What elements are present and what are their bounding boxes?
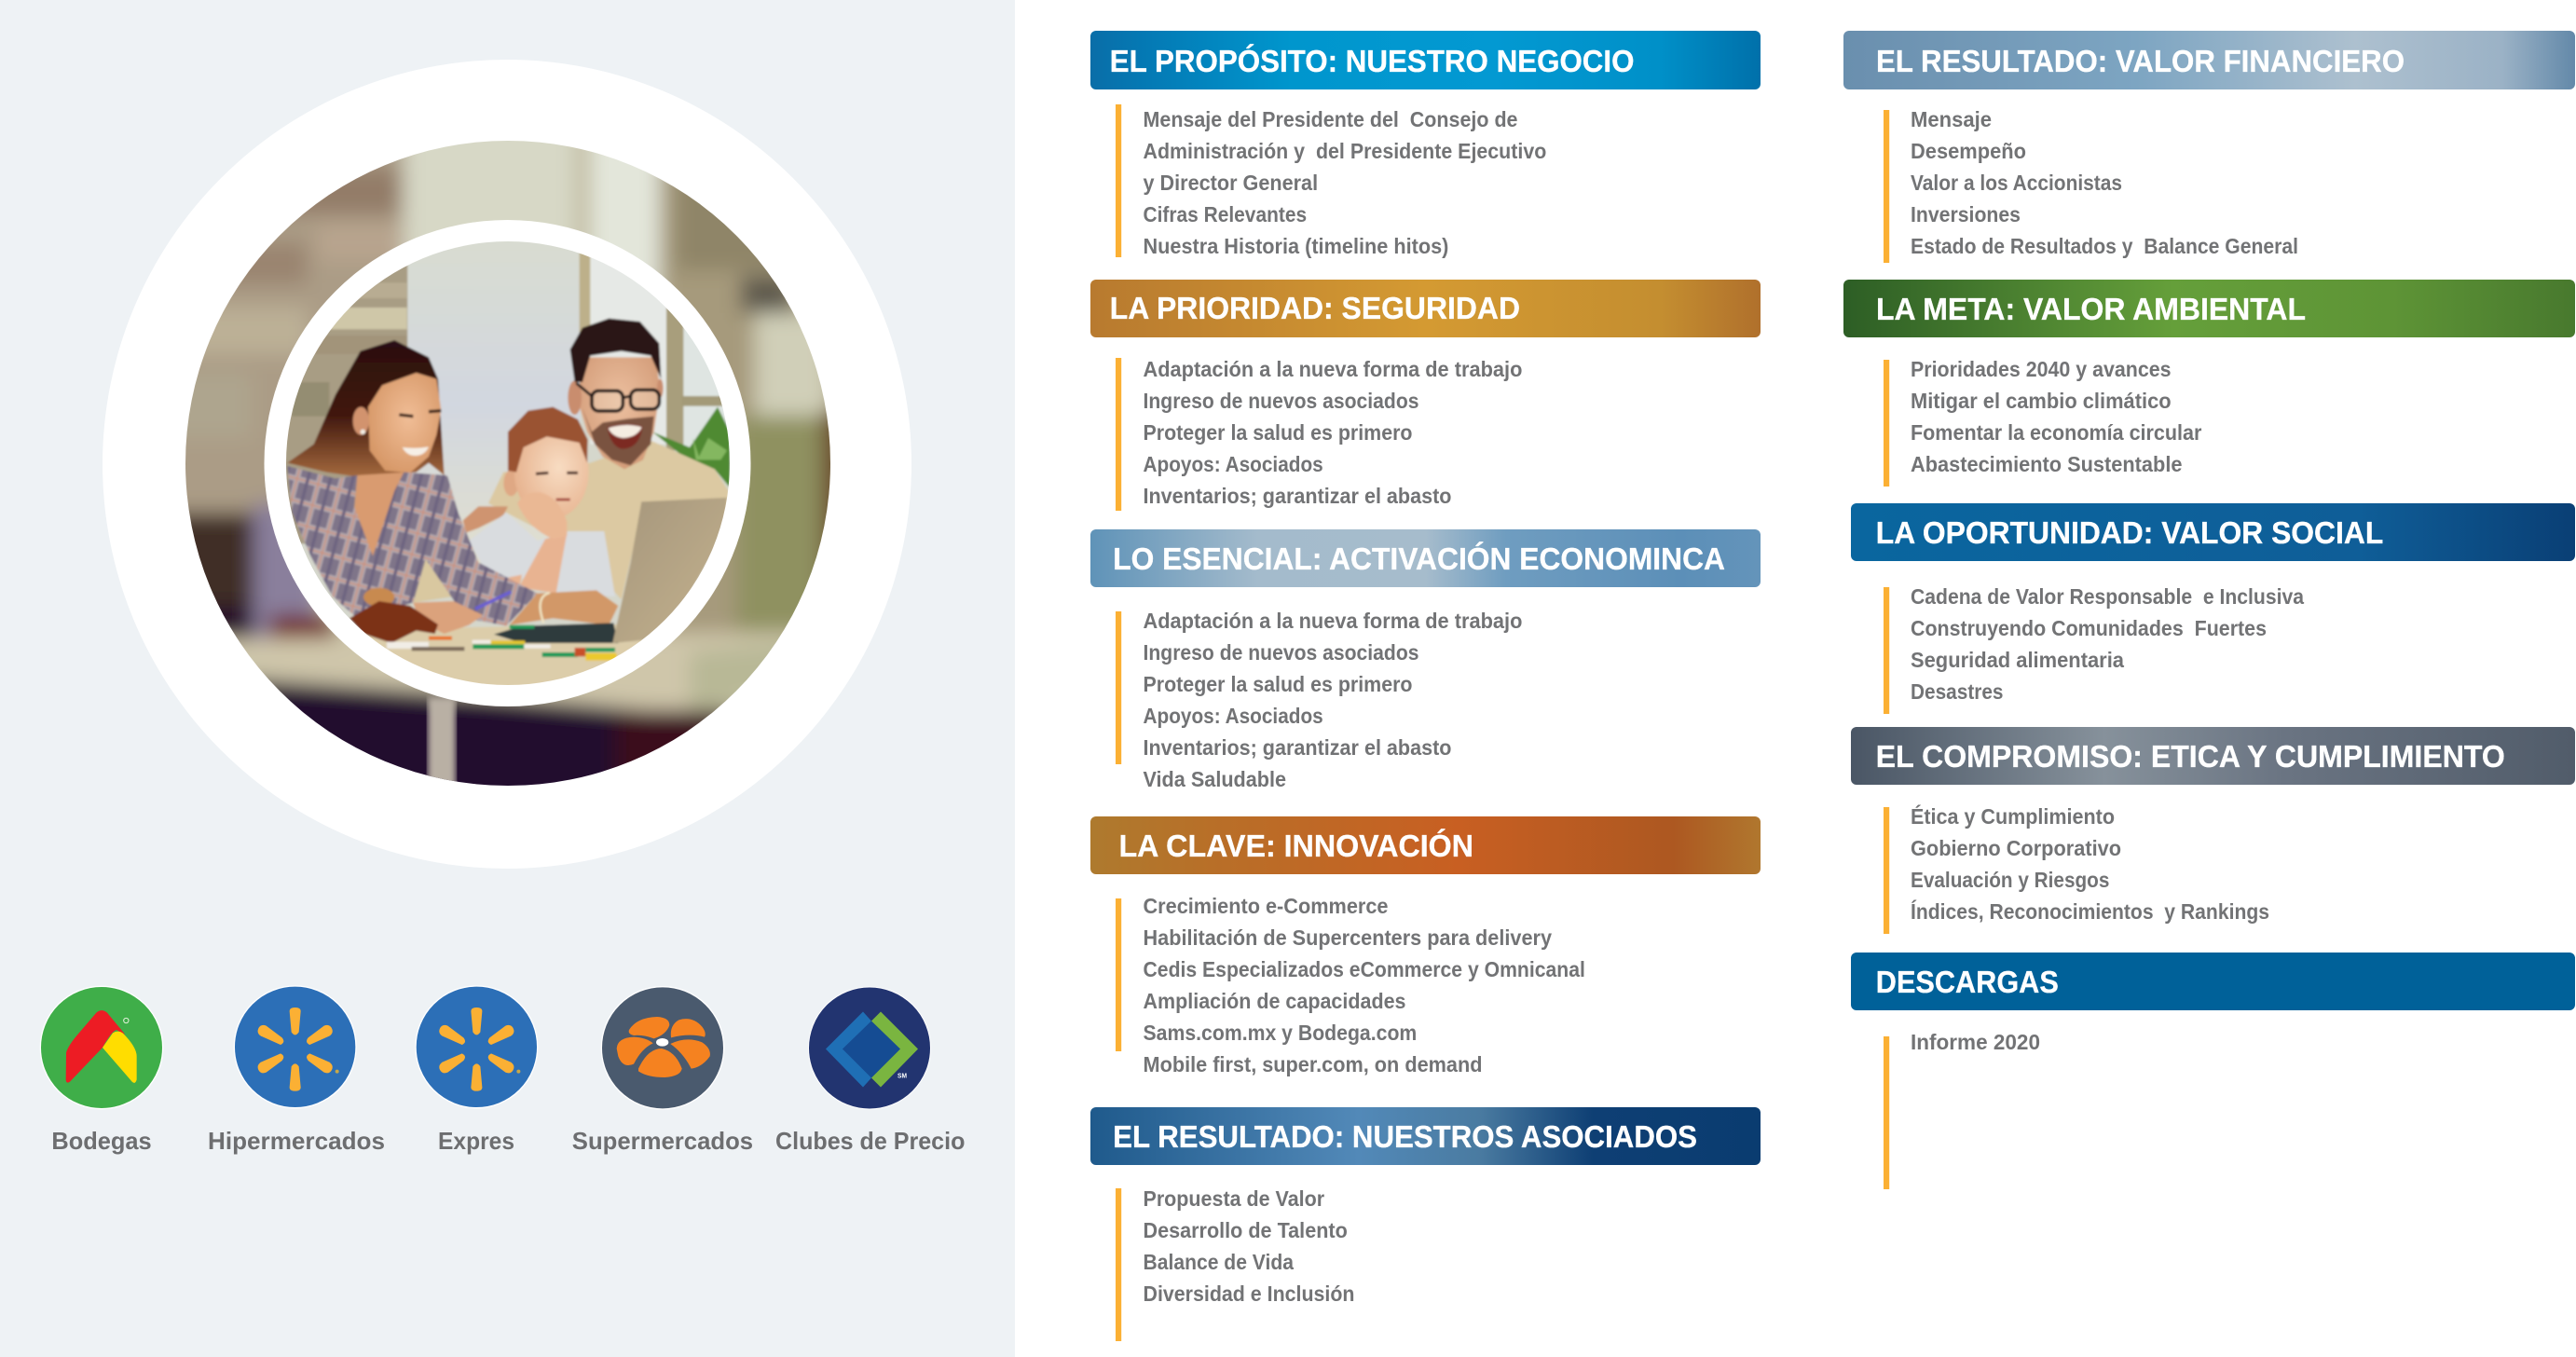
list: Nuestros asociados: Diversidad e Inclusión [1143, 1282, 1355, 1306]
list: Valor ambiental: Abastecimiento Sustentable [1911, 452, 2183, 476]
outer blurred photo ring [185, 141, 830, 786]
list: Valor social: Desastres [1911, 679, 2004, 704]
list: Valor social [1911, 584, 2304, 704]
list: Valor social: Seguridad alimentaria [1911, 648, 2124, 672]
panel: Valor social [1851, 503, 2575, 714]
list: Ética y cumplimiento: Gobierno Corporativo [1911, 836, 2121, 860]
woman skin [354, 473, 407, 559]
heading: Valor social: LA OPORTUNIDAD: VALOR SOCIAL [1876, 515, 2383, 550]
logo: Bodegas [40, 986, 163, 1109]
heading: La prioridad [1090, 280, 1761, 337]
list: La clave: Habilitación de Supercenters para delivery [1143, 925, 1552, 950]
heading: Nuestros asociados: EL RESULTADO: NUESTROS ASOCIADOS [1113, 1119, 1697, 1154]
list: El propósito: Mensaje del Presidente del Consejo de [1143, 107, 1517, 131]
heading: Descargas [1851, 953, 2575, 1010]
heading: Lo esencial [1090, 529, 1761, 587]
list: La prioridad: Apoyos: Asociados [1143, 452, 1323, 476]
heading: Valor ambiental: LA META: VALOR AMBIENTAL [1876, 292, 2306, 326]
list: Lo esencial: Apoyos: Asociados [1143, 704, 1323, 728]
accent bar [1116, 611, 1121, 764]
panel: Nuestros asociados [1090, 1107, 1761, 1341]
panel: Ética y cumplimiento [1851, 727, 2575, 934]
list: La clave: Mobile first, super.com, on demand [1143, 1052, 1482, 1076]
list: El propósito: y Director General [1143, 171, 1318, 195]
heading: La clave [1090, 816, 1761, 874]
heading: Descargas: DESCARGAS [1876, 965, 2059, 999]
laptop [494, 623, 618, 643]
list: Valor ambiental [1911, 357, 2201, 476]
man head [578, 357, 660, 469]
label: Bodegas: Bodegas [51, 1127, 152, 1155]
label: Clubes de Precio: Clubes de Precio [775, 1127, 965, 1155]
logo: Clubes de Precio: SM [897, 1074, 907, 1079]
accent bar [1116, 358, 1121, 511]
list: Nuestros asociados: Desarrollo de Talento [1143, 1218, 1348, 1242]
list: Valor social: Construyendo Comunidades Fuertes [1911, 616, 2267, 640]
bracelet [541, 593, 550, 623]
list: Nuestros asociados: Propuesta de Valor [1143, 1186, 1324, 1211]
plant [652, 407, 730, 487]
list: La clave: Ampliación de capacidades [1143, 989, 1405, 1013]
panel: La clave [1090, 816, 1761, 1076]
panel: Valor financiero [1843, 31, 2575, 263]
list: Descargas: Informe 2020 [1911, 1030, 2040, 1054]
list: Lo esencial: Adaptación a la nueva forma de trabajo [1143, 609, 1522, 633]
panel: Valor ambiental [1843, 280, 2575, 487]
list: Valor financiero: Mensaje [1911, 107, 1992, 131]
list: Lo esencial [1143, 609, 1522, 791]
heading: Nuestros asociados [1090, 1107, 1761, 1165]
list: Valor ambiental: Prioridades 2040 y avances [1911, 357, 2172, 381]
list: Lo esencial: Proteger la salud es primero [1143, 672, 1413, 696]
logo: Supermercados [601, 987, 724, 1109]
accent bar [1116, 1188, 1121, 1341]
label: Hipermercados: Hipermercados [208, 1127, 385, 1155]
list: El propósito: Cifras Relevantes [1143, 202, 1307, 226]
label: Supermercados: Supermercados [572, 1127, 753, 1155]
list: La prioridad: Proteger la salud es primero [1143, 420, 1413, 445]
list: Valor ambiental: Mitigar el cambio climático [1911, 389, 2172, 413]
list: Ética y cumplimiento: Ética y Cumplimiento [1911, 803, 2115, 829]
heading: Ética y cumplimiento: EL COMPROMISO: ETICA Y CUMPLIMIENTO [1876, 739, 2505, 774]
list: Valor financiero: Desempeño [1911, 139, 2026, 163]
woman hair [287, 340, 445, 477]
logo: Expres [416, 986, 538, 1108]
heading: Valor social [1851, 503, 2575, 561]
teddy bear [363, 588, 394, 607]
boy arm and hand [519, 533, 567, 594]
list: Lo esencial: Ingreso de nuevos asociados [1143, 640, 1418, 665]
man hand [463, 506, 508, 533]
inner sharp photo [280, 233, 746, 699]
list: Nuestros asociados [1143, 1186, 1355, 1306]
woman plaid shirt [287, 466, 538, 626]
list: Valor financiero: Inversiones [1911, 202, 2021, 226]
list: Valor financiero: Estado de Resultados y Balance General [1911, 234, 2298, 258]
heading: La clave: LA CLAVE: INNOVACIÓN [1118, 829, 1473, 863]
pen [475, 592, 511, 609]
panel: Lo esencial [1090, 529, 1761, 791]
label: Expres: Expres [438, 1127, 514, 1155]
tan seat behind arm [413, 556, 454, 603]
list: La prioridad: Ingreso de nuevos asociados [1143, 389, 1418, 413]
accent bar [1884, 360, 1889, 487]
man shirt [488, 441, 729, 599]
list: La prioridad: Adaptación a la nueva forma de trabajo [1143, 357, 1522, 381]
outer white ring [103, 60, 911, 869]
boy head [503, 470, 518, 496]
list: Ética y cumplimiento: Evaluación y Riesgos [1911, 868, 2109, 892]
list: Valor financiero [1911, 107, 2298, 258]
list: La prioridad: Inventarios; garantizar el abasto [1143, 484, 1452, 508]
list: La clave: Cedis Especializados eCommerce y Omnicanal [1143, 957, 1585, 981]
photo: family at laptop in concentric circles [103, 60, 911, 869]
heading: La prioridad: LA PRIORIDAD: SEGURIDAD [1110, 291, 1520, 325]
list: Valor social: Cadena de Valor Responsable e Inclusiva [1911, 584, 2304, 609]
brand logos row [40, 986, 965, 1155]
accent bar [1884, 807, 1889, 934]
list: Lo esencial: Inventarios; garantizar el abasto [1143, 735, 1452, 760]
panel: Descargas [1851, 953, 2575, 1189]
woman arm and hand [510, 590, 618, 625]
accent bar [1884, 1036, 1889, 1189]
inner white ring [265, 220, 751, 706]
heading: Lo esencial: LO ESENCIAL: ACTIVACIÓN ECONOMINCA [1113, 541, 1725, 576]
heading: Ética y cumplimiento [1851, 727, 2575, 785]
panel: El propósito [1090, 31, 1761, 258]
list: Nuestros asociados: Balance de Vida [1143, 1250, 1294, 1274]
table leg [428, 697, 456, 790]
list: Ética y cumplimiento [1911, 803, 2269, 924]
list: Valor ambiental: Fomentar la economía circular [1911, 420, 2201, 445]
heading: El propósito: EL PROPÓSITO: NUESTRO NEGOCIO [1110, 44, 1635, 78]
panel: left background [0, 0, 1015, 1357]
list: Lo esencial: Vida Saludable [1143, 767, 1286, 791]
accent bar [1884, 587, 1889, 714]
list: El propósito: Administración y del Presidente Ejecutivo [1143, 139, 1546, 163]
list: La clave: Sams.com.mx y Bodega.com [1143, 1021, 1417, 1045]
list: La clave: Crecimiento e-Commerce [1143, 894, 1389, 918]
list: Ética y cumplimiento: Índices, Reconocimientos y Rankings [1911, 898, 2269, 924]
table [365, 624, 642, 685]
heading: Valor financiero: EL RESULTADO: VALOR FINANCIERO [1876, 44, 2405, 78]
list: Valor financiero: Valor a los Accionistas [1911, 171, 2122, 195]
list: La clave [1143, 894, 1585, 1076]
heading: Valor ambiental [1843, 280, 2575, 337]
accent bar [1116, 104, 1121, 257]
logo: Hipermercados [234, 986, 356, 1108]
list: El propósito [1143, 107, 1546, 258]
logo: Clubes de Precio [809, 987, 930, 1109]
heading: Valor financiero [1843, 31, 2575, 89]
accent bar [1884, 110, 1889, 263]
heading: El propósito [1090, 31, 1761, 89]
boy shirt [469, 513, 615, 596]
panel: La prioridad [1090, 280, 1761, 511]
list: El propósito: Nuestra Historia (timeline hitos) [1143, 234, 1448, 258]
markers [387, 642, 429, 649]
accent bar [1116, 898, 1121, 1051]
list: La prioridad [1143, 357, 1522, 508]
